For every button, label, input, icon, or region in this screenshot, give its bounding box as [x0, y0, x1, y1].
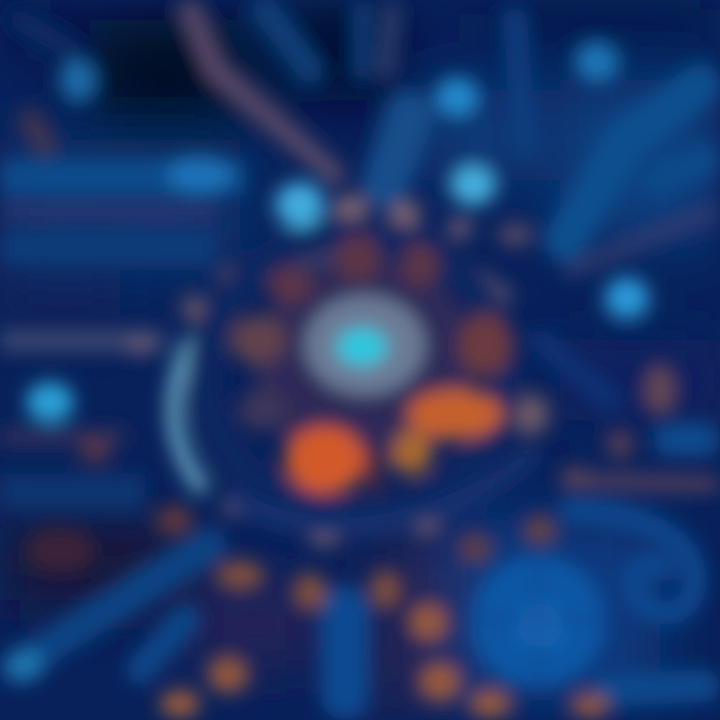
- gear: upper rim: [215, 249, 510, 320]
- gear: inner disc tone: [253, 257, 477, 473]
- circuit traces: left horizontal bands: [0, 160, 245, 510]
- gear: grey hub: [305, 295, 425, 395]
- orange dots along the bottom: [26, 366, 675, 718]
- icon: lower-right swirl: [570, 510, 695, 613]
- glowing nodes: [6, 43, 649, 682]
- gear: dark inner ring: [205, 235, 505, 515]
- icon: lower-right globe: [472, 556, 605, 688]
- gear: outer tooth ring: [127, 195, 588, 546]
- gear: lower rim: [230, 450, 535, 527]
- circuit traces: pink diagonal line from top: [30, 10, 392, 175]
- gear: orange blocks: [285, 389, 503, 494]
- circuit traces: lower left and bottom bands: [16, 545, 704, 696]
- gear: cyan centre: [337, 328, 387, 366]
- gear: reddish segments: [230, 234, 511, 430]
- circuit traces: blue upper and right bands: [20, 10, 714, 484]
- gear: left pale arc: [174, 345, 200, 485]
